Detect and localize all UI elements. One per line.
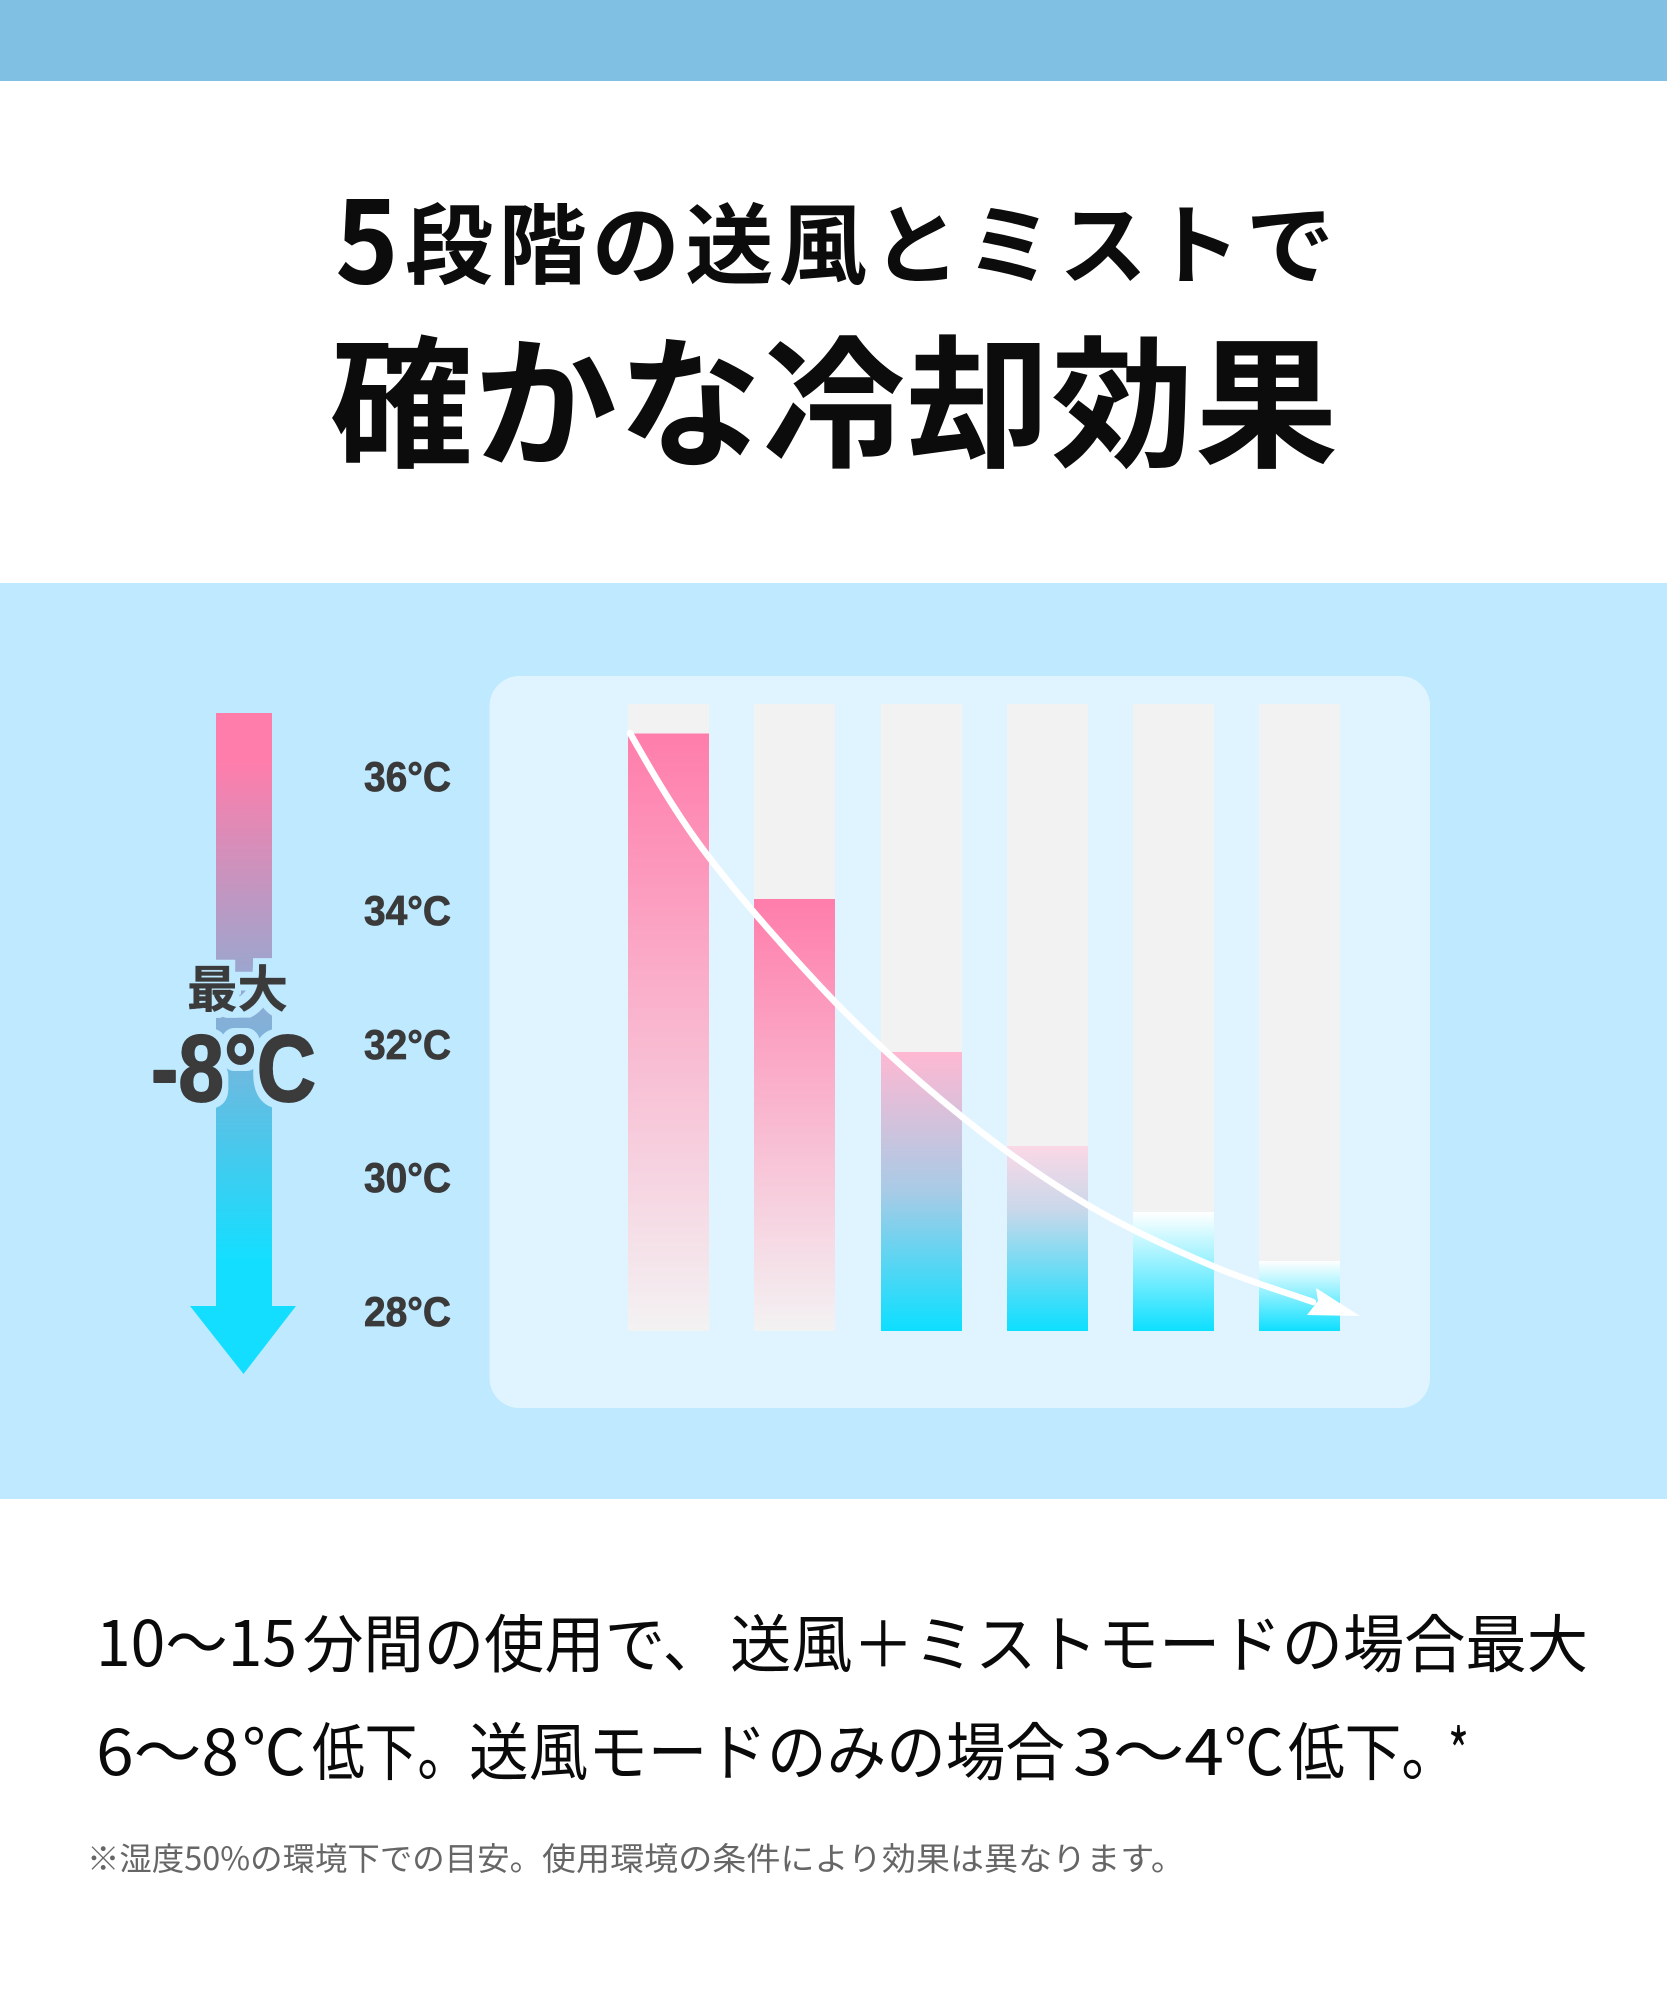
- temperature axis labels: 32°C: [364, 1021, 451, 1068]
- temperature axis labels: 36°C: [364, 753, 451, 800]
- description line 1: 送風＋ミストモードの場合最大: [730, 1595, 1588, 1686]
- description line 2: 低下。: [1288, 1703, 1458, 1794]
- arrow: declining temperature curve: [630, 733, 1360, 1316]
- bar 1: 36 degrees: [628, 704, 709, 1331]
- panel: cooling chart background: [0, 583, 1667, 1499]
- callout: max minus 8 degrees: 最大: [187, 950, 288, 1022]
- bar 6: [1259, 704, 1340, 1331]
- description line 2: *: [1448, 1703, 1469, 1794]
- footnote: ※湿度50%の環境下での目安。: [87, 1834, 542, 1880]
- footnote: 使用環境の条件により効果は異なります。: [542, 1834, 1185, 1880]
- description line 2: ℃: [1224, 1703, 1284, 1794]
- icon: temperature drop arrow: [190, 713, 296, 1374]
- top colour band: [0, 0, 1667, 81]
- description line 2: 低下。: [312, 1703, 470, 1794]
- bar 4: [1007, 704, 1088, 1331]
- title line 1: 段階の送風とミストで: [405, 176, 1334, 303]
- description line 2: 3～4: [1073, 1703, 1224, 1794]
- bar 5: [1133, 704, 1214, 1331]
- title line 2: 確かな冷却効果: [330, 291, 1338, 498]
- title: [330, 152, 1338, 498]
- description line 1: 10～15: [96, 1594, 297, 1685]
- text block: description: [96, 1594, 1588, 1794]
- bar 3: [881, 704, 962, 1331]
- temperature axis labels: 28°C: [364, 1288, 451, 1335]
- footnote: [87, 1834, 1185, 1880]
- callout: max minus 8 degrees: -8°C: [151, 1016, 316, 1122]
- description line 2: [96, 1703, 1469, 1794]
- temperature axis labels: 30°C: [364, 1154, 451, 1201]
- callout: max minus 8 degrees: [151, 950, 316, 1122]
- bar 2: [754, 704, 835, 1331]
- description line 2: ℃: [242, 1703, 306, 1794]
- description line 1: [96, 1594, 1588, 1686]
- panel: bar chart card: [490, 676, 1430, 1408]
- description line 2: 6～8: [96, 1703, 239, 1794]
- temperature axis labels: 34°C: [364, 887, 451, 934]
- temperature axis labels: [364, 753, 451, 1335]
- description line 2: 送風モードのみの場合: [469, 1703, 1065, 1794]
- title line 1: 5: [336, 152, 398, 316]
- description line 1: 分間の使用で、: [303, 1595, 723, 1686]
- bar chart: [628, 704, 1340, 1331]
